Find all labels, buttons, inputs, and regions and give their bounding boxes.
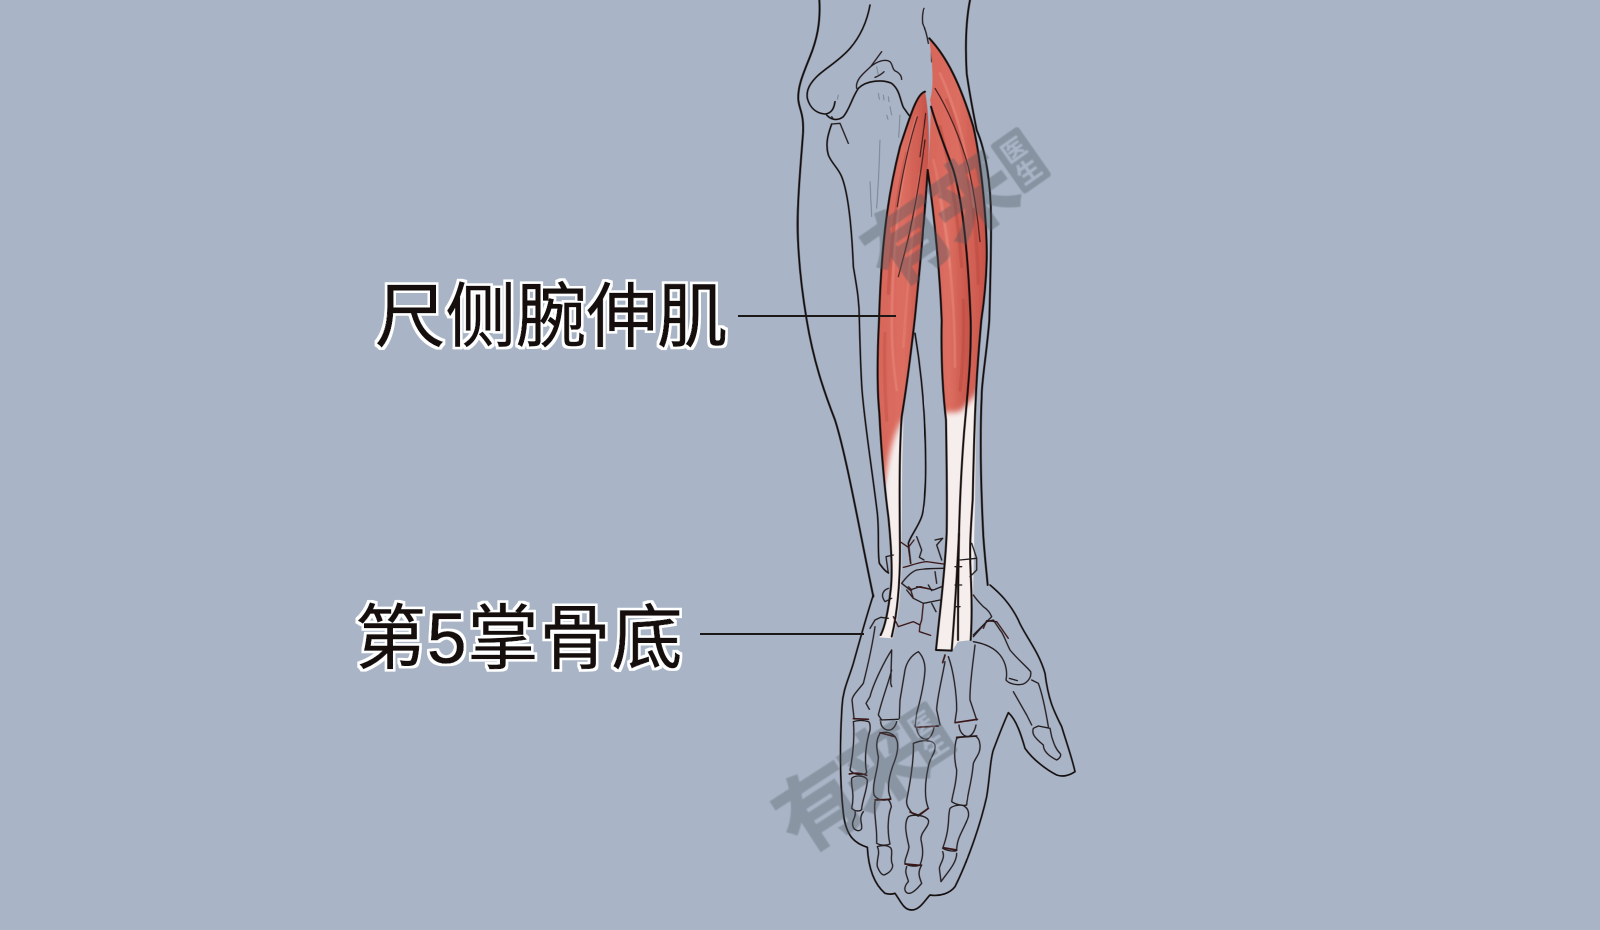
watermark: upper 有来医生 (847, 114, 1063, 305)
watermark badge: 生 (918, 729, 953, 765)
hand outline (840, 585, 1075, 910)
little finger bones (849, 627, 892, 831)
ring finger bones (874, 650, 918, 875)
muscle and tendon edge lines (878, 38, 987, 651)
finger bones (849, 620, 1061, 893)
arm outline (798, 0, 991, 597)
watermark badge (990, 126, 1052, 195)
watermark: upper 有来医生: 来 (912, 135, 1035, 260)
tendons: radialis brevis and longus (937, 389, 977, 652)
tendon: ulnaris (879, 416, 904, 638)
forearm and hand illustration (798, 0, 1075, 910)
watermark: lower 有来医生: 有 (759, 746, 880, 871)
watermark badge: 医 (904, 707, 939, 743)
watermark: upper 有来医生: 有 (847, 180, 970, 305)
watermark: lower 有来医生 (759, 688, 969, 871)
leader line to muscle (738, 315, 896, 317)
humerus and elbow bones (807, 5, 932, 573)
muscle: extensor carpi ulnaris (878, 92, 929, 490)
watermark badge: 生 (1012, 154, 1047, 190)
watermark badge (897, 700, 958, 769)
watermark: lower 有来医生: 来 (823, 705, 944, 829)
wrist bones (870, 537, 1008, 638)
muscle: extensor carpi radialis brevis (928, 100, 971, 420)
muscle: extensor carpi radialis longus (929, 38, 987, 408)
index finger bones (939, 645, 980, 882)
label: 第5掌骨底: 第5掌骨底 (355, 600, 684, 679)
leader line to fifth metacarpal base (700, 633, 864, 635)
middle finger bones (905, 652, 945, 893)
infographic canvas (355, 0, 1076, 911)
watermark badge: 医 (997, 133, 1032, 169)
thumb bones (973, 620, 1061, 760)
label: 尺侧腕伸肌: 尺侧腕伸肌 (375, 277, 728, 356)
